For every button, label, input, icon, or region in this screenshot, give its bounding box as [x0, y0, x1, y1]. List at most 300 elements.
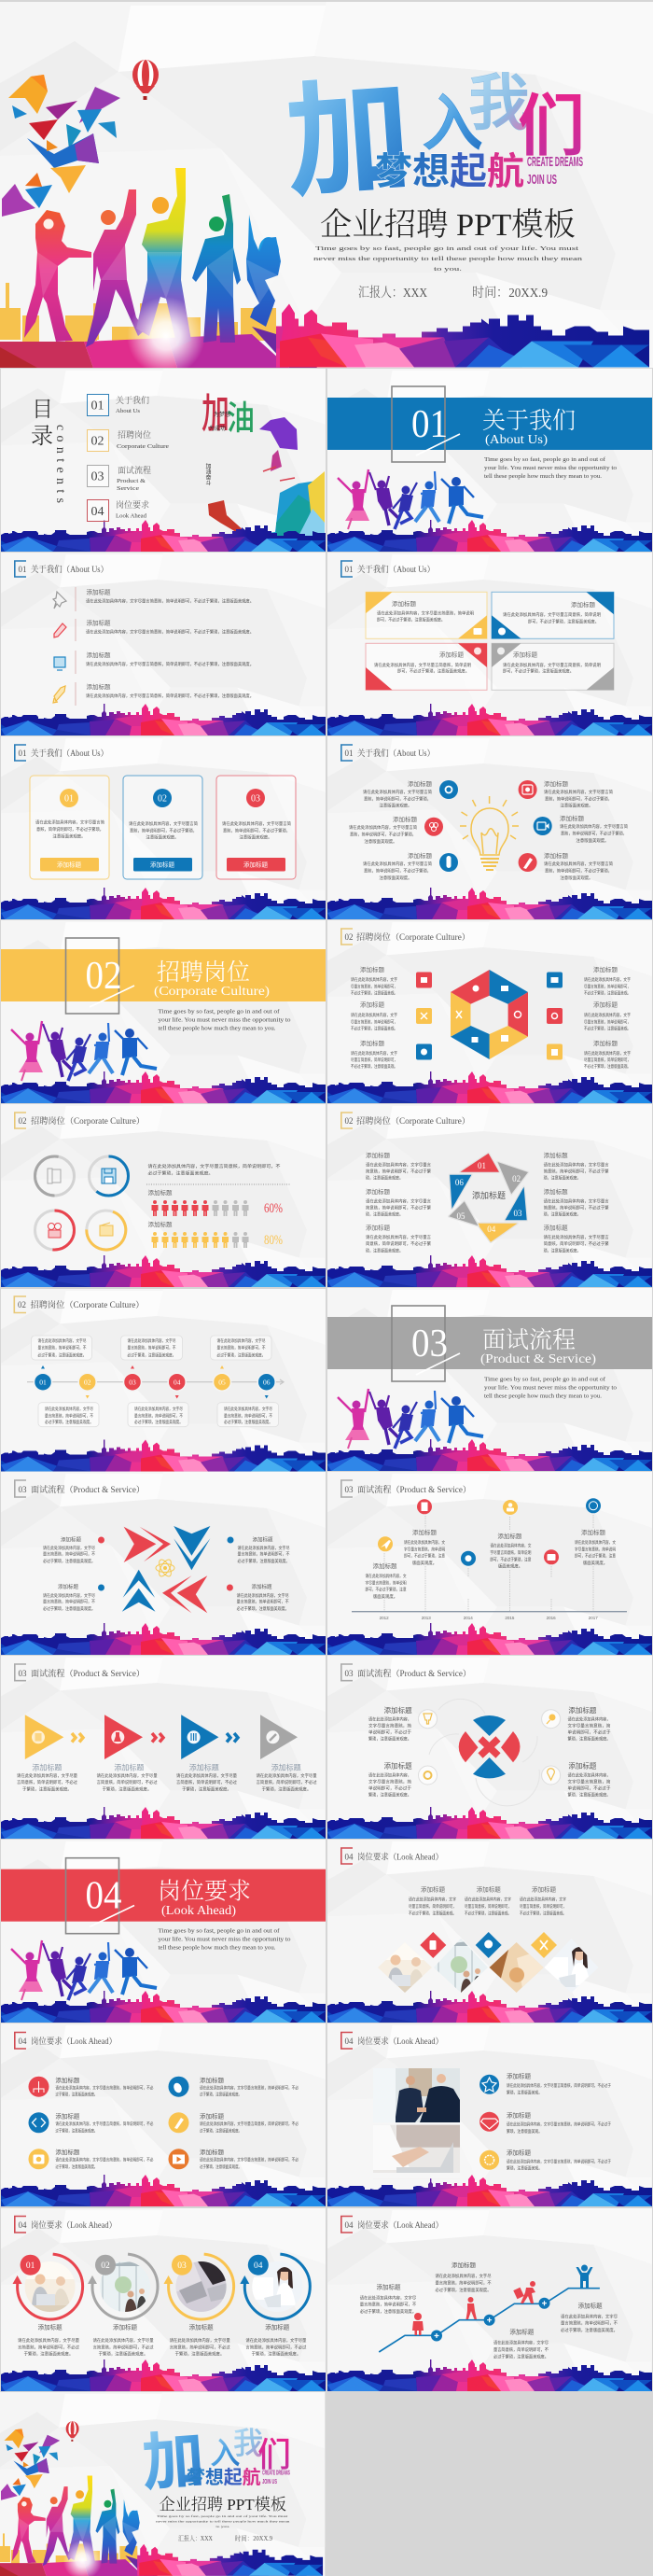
- text block 4: 必过于繁琐，注意版面美观度。: [561, 2327, 618, 2333]
- text block 3: [507, 2148, 611, 2172]
- panel: interview year timeline: [327, 1472, 652, 1655]
- calligraphy heading: JOIN US: [527, 172, 557, 188]
- callout text bottom: 请在此处添加具体内容，文字尽: [45, 1406, 94, 1412]
- text block 2017: 请在此处添加具体内容，文: [575, 1539, 616, 1546]
- text column 1: 尽量言简意赅，简单说明即可，: [409, 1903, 456, 1910]
- contents heading: 录: [31, 425, 53, 449]
- text block 2015: [490, 1532, 532, 1570]
- step 2 text: 添加标题: [114, 1763, 144, 1772]
- text block: middle left: 请在此处添加具体内容，文字尽量言简: [349, 824, 418, 831]
- circular step 03: 03: [177, 2261, 187, 2271]
- icon: star: [479, 2075, 499, 2094]
- text blocks left: 添加标题: [366, 1187, 390, 1196]
- list item 2: 添加标题: [86, 618, 111, 627]
- panel: interview triangles flow: [1, 1656, 326, 1839]
- item text right 1: [200, 2076, 299, 2098]
- section body: [159, 1927, 291, 1951]
- closing reporter and date: 汇报人：XXX: [178, 2534, 213, 2542]
- step 3 text: [176, 1763, 238, 1793]
- item text left 3: 添加标题: [55, 2148, 80, 2156]
- section body: your life. You must never miss the opportunity to: [159, 1017, 291, 1023]
- contents item 04: 04: [91, 505, 104, 519]
- text block 2015: 添加标题: [497, 1532, 522, 1540]
- icon squares left: [416, 973, 432, 1060]
- text block: lower right: [544, 851, 614, 881]
- circular step 01: 01: [26, 2261, 35, 2271]
- slide header: 岗位要求（Look Ahead）: [31, 2036, 117, 2046]
- contents art: painted man and slogan: 为成功: [209, 425, 226, 432]
- card: yellow: 即可，不必过于繁琐，注意版面美观度。: [377, 617, 445, 623]
- icon: gear: [418, 1766, 437, 1785]
- slide header: 招聘岗位（Corporate Culture）: [31, 1115, 145, 1126]
- slide header: 岗位要求（Look Ahead）: [31, 2219, 117, 2230]
- text block: top right: 请在此处添加具体内容，文字尽: [237, 1545, 290, 1551]
- ring: phone: [35, 1156, 75, 1196]
- section number: 02: [86, 955, 121, 998]
- text block: middle left: 添加标题: [393, 815, 418, 823]
- list item 3: 添加标题: [86, 651, 111, 659]
- icon circle: tube: [439, 853, 458, 872]
- text block: lower right: 请在此处添加具体内容，文字尽量言简: [544, 861, 614, 867]
- closing reporter and date: [178, 2534, 272, 2542]
- list item 1: [86, 588, 254, 605]
- slide header: 04: [19, 2037, 27, 2046]
- pictogram row 80%: 80%: [264, 1233, 283, 1248]
- section body: Time goes by so fast, people go in and out of: [484, 1376, 605, 1382]
- column card 02: 添加标题: [150, 861, 175, 868]
- column card 01: 01: [64, 793, 74, 805]
- icon: briefcase: [544, 1549, 559, 1564]
- closing body text: [156, 2514, 290, 2528]
- text blocks right: 请在此处添加具体内容，文字: [584, 1012, 632, 1018]
- slide header: 04: [345, 1852, 354, 1861]
- city skyline: [1, 886, 326, 919]
- callout text bottom: 量言简意赅，简单说明即可，不: [134, 1412, 184, 1419]
- text blocks right: 请在此处添加具体内容，文字: [584, 976, 632, 983]
- text block bottom right: [567, 1760, 611, 1799]
- text block: upper left: 意赅，简单说明即可，不必过于繁琐，: [364, 795, 431, 802]
- text blocks left: 简意赅，简单说明即可，不必过于繁: [366, 1240, 432, 1247]
- slide header: [15, 2216, 117, 2233]
- number frame: [65, 1858, 134, 1934]
- text column 1: 请在此处添加具体内容，文字: [409, 1897, 457, 1903]
- text block: upper right: 添加标题: [544, 779, 569, 788]
- contents item 03: Service: [117, 486, 140, 492]
- text block 2015: 字尽量言简意赅，简单说明: [490, 1549, 532, 1556]
- step 04 text: [245, 2322, 307, 2358]
- triangle numbers: 06: [455, 1178, 464, 1187]
- icon: film: [168, 2149, 188, 2169]
- text block: bottom right: 量言简意赅，简单说明即可，不: [237, 1599, 289, 1605]
- card: grey: 添加标题: [513, 651, 537, 659]
- text blocks right: 琐，注意版面美观度。: [544, 1175, 581, 1182]
- panel: requirements photos list: [327, 2023, 652, 2206]
- list item 1: 添加标题: [86, 588, 111, 596]
- cover body text: Time goes by so fast, people go in and out of your life. You must: [315, 245, 578, 252]
- slide header: 01: [345, 749, 353, 758]
- slide header: [341, 1664, 471, 1681]
- step 02 text: 添加标题: [113, 2322, 138, 2331]
- text blocks right: 添加标题: [593, 1001, 618, 1009]
- card: blue: 即可，不必过于繁琐，注意版面美观度。: [528, 619, 599, 625]
- text block 1: 添加标题: [507, 2072, 532, 2080]
- year axis: 2012: [380, 1616, 389, 1620]
- contents heading: [31, 398, 67, 503]
- callout text bottom: 必过于繁琐，注意版面美观度。: [134, 1419, 183, 1425]
- slide header: 03: [19, 1669, 27, 1678]
- step 01 text: 于繁琐，注意版面美观度。: [24, 2351, 73, 2358]
- text block 1: 必过于繁琐，注意版面美观度。: [360, 2308, 416, 2315]
- contents item 02: [88, 429, 170, 452]
- text block: middle left: 意赅，简单说明即可，不必过于繁琐，: [350, 832, 416, 838]
- jumping people: [338, 1389, 483, 1449]
- section band: [327, 398, 652, 450]
- slide header: 04: [19, 2220, 27, 2230]
- text block: middle right: 添加标题: [560, 814, 584, 822]
- callout text top: 量言简意赅，简单说明即可，不: [127, 1345, 176, 1351]
- text block 1: 繁琐，注意版面美观。: [507, 2089, 542, 2095]
- calligraphy heading: 加: [281, 64, 416, 214]
- text block 2: [435, 2261, 492, 2293]
- number frame: [65, 938, 134, 1014]
- text blocks left: 简意赅，简单说明即可，不必过于繁: [366, 1204, 432, 1211]
- chart description: [147, 1163, 281, 1176]
- city skyline: [327, 1621, 652, 1655]
- closing calligraphy heading: JOIN US: [262, 2477, 277, 2485]
- contents item 01: [88, 394, 149, 416]
- text blocks right: 添加标题: [544, 1187, 568, 1196]
- contents item 03: Product &: [117, 479, 146, 484]
- step 02 text: [93, 2322, 154, 2358]
- city skyline: [1, 1070, 326, 1103]
- text blocks left: 添加标题: [360, 1001, 384, 1009]
- text block 2013: 即可，不必过于繁琐，注意: [404, 1553, 445, 1560]
- panel: section 04 divider: [1, 1840, 326, 2023]
- text block 2012: [366, 1561, 407, 1600]
- photo diamonds: [378, 1939, 589, 1993]
- item text right 1: 过于繁琐，注意版面美观度。: [200, 2092, 242, 2098]
- list item 4: 请在此处添加具体内容，文字尽量言简意赅，简单说明即可，不必过于繁琐，注意版面美观度。: [86, 693, 254, 699]
- callout text bottom: 必过于繁琐，注意版面美观度。: [224, 1419, 272, 1425]
- slide header: [341, 2033, 443, 2049]
- section body: tell these people how much they mean to you.: [159, 1945, 276, 1951]
- text block: upper left: 请在此处添加具体内容，文字尽量言简: [363, 789, 433, 795]
- text column 3: 尽量言简意赅，简单说明即可，: [520, 1903, 566, 1910]
- dividers: [75, 587, 76, 706]
- node numbers: 06: [263, 1378, 271, 1387]
- card: grey: 请在此处添加具体内容，文字尽量言简意赅，简单说明: [503, 662, 602, 668]
- callout text top: 必过于繁琐，注意版面美观度。: [216, 1351, 265, 1358]
- text block top right: 添加标题: [568, 1705, 597, 1715]
- text block top left: 添加标题: [384, 1705, 412, 1715]
- step 2 triangle: [104, 1715, 143, 1759]
- contents item 03: 03: [91, 470, 104, 483]
- slide header: 招聘岗位（Corporate Culture）: [356, 931, 470, 942]
- text block: bottom left: 添加标题: [58, 1583, 78, 1590]
- column card 01: 请在此处添加具体内容，文字尽量言简: [35, 819, 105, 826]
- section title: 面试流程: [482, 1327, 576, 1353]
- reporter and date: [358, 285, 548, 301]
- section body: [484, 456, 617, 480]
- text block top left: [368, 1705, 412, 1742]
- city skyline: [1, 1805, 326, 1839]
- text blocks left: 尽量言简意赅，简单说明即可，: [351, 1018, 397, 1025]
- text block: top right: 添加标题: [252, 1536, 273, 1544]
- text block: bottom right: 必过于繁琐，注意版面美观度。: [237, 1605, 289, 1612]
- text block bottom right: 文字尽量言简意赅，简: [567, 1779, 611, 1785]
- slide header: [15, 745, 108, 761]
- text blocks left: 琐，注意版面美观度。: [366, 1247, 403, 1253]
- text block 4: 添加标题: [578, 2301, 603, 2309]
- text block: top right: 量言简意赅，简单说明即可，不: [237, 1551, 290, 1558]
- text block: bottom left: [43, 1583, 96, 1612]
- city skyline: [327, 702, 652, 735]
- text block 2017: [575, 1528, 616, 1566]
- slide header: 03: [345, 1669, 354, 1678]
- slide header: [341, 1113, 470, 1128]
- item text left 3: 请在此处添加具体内容，文字尽量言简意赅，简单说明即可，不必: [55, 2157, 154, 2163]
- item text right 2: 添加标题: [200, 2112, 224, 2121]
- arrow: blue up: [122, 1570, 155, 1612]
- timeline axis: [27, 1379, 284, 1384]
- city skyline: [327, 2358, 652, 2391]
- step 4 text: 添加标题: [271, 1763, 301, 1772]
- icon: pin head: [542, 1710, 561, 1729]
- closing calligraphy heading: 加: [140, 2425, 207, 2499]
- step 04 text: 言简意赅，简单说明即可，不必过: [245, 2344, 307, 2350]
- contents art: painted man and slogan: 加油奋斗: [204, 462, 211, 485]
- city skyline: [327, 518, 652, 552]
- slide header: 招聘岗位（Corporate Culture）: [30, 1299, 144, 1309]
- icon: plane: [378, 1536, 393, 1551]
- section band: [327, 1317, 652, 1369]
- text block: bottom left: 必过于繁琐，注意版面美观度。: [43, 1605, 95, 1612]
- callout text top: 请在此处添加具体内容，文字尽: [127, 1337, 176, 1344]
- card: blue: 添加标题: [571, 600, 595, 609]
- slide header: 01: [19, 749, 26, 758]
- column card 01: 意赅，简单说明即可，不必过于繁琐，: [36, 826, 104, 833]
- step 3 text: 请在此处添加具体内容，文字尽量: [176, 1772, 238, 1779]
- icon: code: [28, 2112, 49, 2133]
- step 03 text: 添加标题: [189, 2322, 214, 2331]
- text block: middle left: 注意版面美观度。: [364, 838, 397, 845]
- callout text top: 必过于繁琐，注意版面美观度。: [127, 1351, 175, 1358]
- step 2 text: 言简意赅，简单说明即可，不必过: [97, 1779, 158, 1785]
- number frame: [392, 386, 460, 462]
- chart description: 必过于繁琐，注意版面美观度。: [147, 1169, 213, 1176]
- text blocks right: 尽量言简意赅，简单说明即可，: [584, 1018, 631, 1025]
- text column 3: 不必过于繁琐，注意版面美观。: [520, 1910, 566, 1916]
- slide header: [15, 1113, 145, 1128]
- city skyline: [327, 1437, 652, 1471]
- section body: Time goes by so fast, people go in and out of: [484, 456, 605, 463]
- staircase line: [379, 2289, 600, 2352]
- icon circle: video: [534, 817, 552, 835]
- step 1 text: 请在此处添加具体内容，文字尽量: [17, 1772, 78, 1779]
- city skyline: [1, 1621, 326, 1655]
- text blocks right: 添加标题: [593, 1039, 618, 1047]
- slide header: 04: [345, 2220, 354, 2230]
- closing body text: Time goes by so fast, people go in and out of your life. You must: [157, 2514, 288, 2519]
- callout text bottom: 量言简意赅，简单说明即可，不: [224, 1412, 273, 1419]
- item text right 3: 添加标题: [200, 2148, 224, 2156]
- contents item 02: 02: [91, 435, 104, 448]
- text column 1: 不必过于繁琐，注意版面美观。: [409, 1910, 456, 1916]
- column card 03: 添加标题: [243, 861, 269, 868]
- calligraphy heading: [281, 64, 585, 214]
- city skyline: [1, 1437, 326, 1471]
- slide header: [15, 1480, 145, 1497]
- panel: closing slide: CREATE DREAMS: [262, 2468, 290, 2477]
- text block bottom left: 单说明即可，不必过于: [368, 1785, 412, 1792]
- arrow: blue down: [174, 1526, 210, 1570]
- text block 1: 量言简意赅，简单说明即可，不: [360, 2302, 417, 2308]
- icon: pencil: [54, 623, 66, 637]
- text block: bottom right: [237, 1583, 289, 1612]
- section body: your life. You must never miss the opportunity to: [484, 465, 617, 471]
- text block: top left: 添加标题: [61, 1536, 81, 1544]
- slide header: 01: [345, 565, 353, 574]
- text block bottom right: 单说明即可，不必过于: [567, 1785, 611, 1792]
- item text left 1: 过于繁琐，注意版面美观度。: [55, 2092, 97, 2098]
- photo: handshake: [373, 2068, 460, 2122]
- section title: 岗位要求: [158, 1878, 251, 1904]
- step 1 text: 添加标题: [32, 1763, 62, 1772]
- jumping people: [338, 469, 483, 529]
- node numbers: 01: [39, 1378, 47, 1387]
- slide header: 关于我们（About Us）: [357, 564, 435, 574]
- stems: [384, 1515, 593, 1611]
- step 1 text: 言简意赅，简单说明即可，不必过: [17, 1779, 78, 1785]
- city skyline: [327, 1989, 652, 2023]
- text blocks right: 简意赅，简单说明即可，不必过于繁: [544, 1240, 609, 1247]
- calligraphy heading: 我: [468, 68, 530, 137]
- panel: contents slide: [1, 369, 326, 552]
- item text right 2: 过于繁琐，注意版面美观度。: [200, 2127, 242, 2134]
- callout boxes top: [32, 1336, 271, 1360]
- column card 02: 请在此处添加具体内容，文字尽量言简: [129, 820, 199, 827]
- slide header: 岗位要求（Look Ahead）: [357, 2036, 443, 2046]
- slide header: 招聘岗位（Corporate Culture）: [356, 1115, 470, 1126]
- icon: trophy: [418, 1710, 437, 1729]
- icon: globe: [586, 1498, 601, 1513]
- pictogram row 60%: 添加标题: [147, 1188, 173, 1197]
- text block: top left: 必过于繁琐，注意版面美观度。: [43, 1558, 95, 1564]
- text blocks left: 添加标题: [360, 1039, 384, 1047]
- text block bottom left: 文字尽量言简意赅，简: [368, 1779, 412, 1785]
- step 4 triangle: [260, 1715, 298, 1759]
- slide header: [15, 561, 108, 577]
- circular step 03: [164, 2251, 237, 2322]
- panel: cover slide: [0, 2, 653, 375]
- text blocks left: 请在此处添加具体内容，文字: [351, 1050, 398, 1057]
- column card 01: [30, 776, 109, 879]
- text block 2013: 请在此处添加具体内容，文: [404, 1539, 445, 1546]
- jumping people: [11, 1021, 157, 1081]
- text block 3: [493, 2328, 549, 2359]
- text blocks left: [366, 1151, 432, 1253]
- text block 2012: 版面美观度。: [373, 1593, 397, 1600]
- contents item 04: 岗位要求: [116, 499, 149, 510]
- text block: top right: [237, 1536, 290, 1564]
- triangle cycle diagram: [449, 1154, 528, 1242]
- list item 1: 请在此处添加具体内容，文字尽量言简意赅，简单说明即可，不必过于繁琐，注意版面美观度。: [86, 598, 254, 605]
- step 04 text: 请在此处添加具体内容，文字尽量: [245, 2337, 307, 2344]
- callout text top: 请在此处添加具体内容，文字尽: [216, 1337, 266, 1344]
- closing calligraphy heading: 我: [233, 2426, 264, 2460]
- hexagon ring: [451, 970, 528, 1059]
- item text left 2: 过于繁琐，注意版面美观度。: [55, 2127, 97, 2134]
- icon: light bulb: [460, 796, 519, 870]
- calligraphy heading: 入: [422, 89, 483, 158]
- text block: bottom left: 量言简意赅，简单说明即可，不: [43, 1599, 96, 1605]
- section body: [484, 1376, 617, 1399]
- step 4 text: 于繁琐，注意版面美观度。: [262, 1786, 311, 1793]
- item text right 3: 请在此处添加具体内容，文字尽量言简意赅，简单说明即可，不必: [200, 2157, 299, 2163]
- icon: pen: [168, 2112, 188, 2133]
- text blocks left: 请在此处添加具体内容，文字尽量言: [366, 1197, 432, 1204]
- step 02 text: 言简意赅，简单说明即可，不必过: [93, 2344, 154, 2350]
- pointer triangles: [41, 1365, 269, 1398]
- city skyline: [327, 2173, 652, 2206]
- step 02 text: 请在此处添加具体内容，文字尽量: [93, 2337, 154, 2344]
- icon circle: camera: [519, 780, 537, 799]
- closing body text: never miss the opportunity to tell these people how much they mean: [156, 2519, 290, 2523]
- text block 2012: 字尽量言简意赅，简单说明: [366, 1579, 407, 1586]
- text block: middle left: [349, 815, 418, 845]
- panel: interview cross diagram: [327, 1656, 652, 1839]
- text block: upper left: 添加标题: [408, 779, 433, 788]
- item text right 3: 过于繁琐，注意版面美观度。: [200, 2163, 242, 2170]
- icon diamond: yellow: [531, 1932, 557, 1958]
- icon circle: pen: [519, 853, 537, 872]
- triangle numbers: 04: [487, 1225, 496, 1234]
- section subtitle: (Corporate Culture): [154, 985, 270, 999]
- step 3 text: 添加标题: [189, 1763, 219, 1772]
- icon: gear: [479, 2150, 499, 2170]
- text blocks right: 尽量言简意赅，简单说明即可，: [584, 1057, 631, 1063]
- icon: mouse: [168, 2077, 188, 2097]
- text block: upper right: [544, 779, 614, 809]
- slide header: 关于我们（About Us）: [31, 748, 108, 758]
- circular step 04: 04: [254, 2261, 263, 2271]
- text block 2: [507, 2111, 611, 2135]
- slide header: 面试流程（Product & Service）: [31, 1484, 145, 1494]
- text block 2015: 请在此处添加具体内容，文: [490, 1543, 532, 1549]
- text block bottom left: 添加标题: [384, 1760, 412, 1770]
- jumping people: [11, 1940, 157, 2000]
- icon: location: [542, 1766, 561, 1785]
- text blocks left: 请在此处添加具体内容，文字尽量言: [366, 1234, 432, 1240]
- node numbers: [39, 1378, 271, 1387]
- text blocks left: 尽量言简意赅，简单说明即可，: [351, 1057, 397, 1063]
- item text right 1: 添加标题: [200, 2076, 224, 2084]
- section band: [1, 949, 326, 1001]
- slide header: 02: [19, 1116, 26, 1126]
- text block top right: 繁琐，注意版面美观度。: [567, 1735, 610, 1742]
- closing calligraphy heading: 们: [257, 2435, 291, 2474]
- text block 4: 请在此处添加具体内容，文字尽: [561, 2313, 618, 2319]
- text blocks left: 不必过于繁琐，注意版面美观。: [351, 989, 397, 996]
- closing calligraphy heading: 入: [210, 2436, 241, 2471]
- text block: lower right: 注意版面美观度。: [560, 875, 593, 881]
- icon: pin: [53, 592, 66, 609]
- year axis: 2016: [547, 1616, 556, 1620]
- callout text bottom: 请在此处添加具体内容，文字尽: [134, 1406, 184, 1412]
- section subtitle: (Product & Service): [480, 1352, 596, 1366]
- panel: about us three columns: [1, 736, 326, 919]
- text block 1: [360, 2282, 417, 2315]
